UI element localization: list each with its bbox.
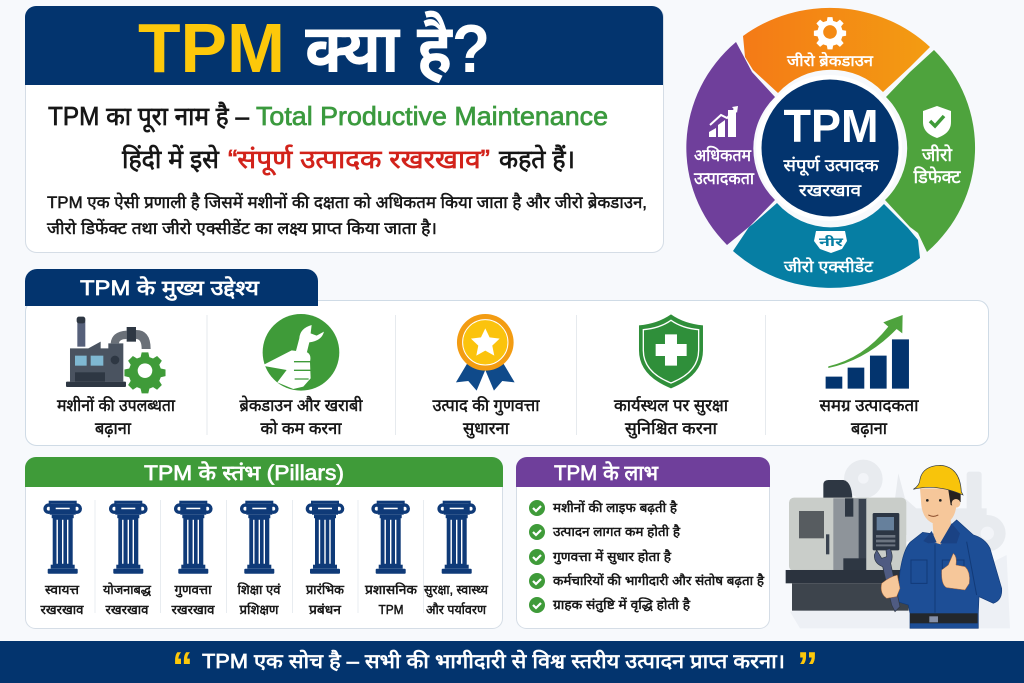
objective: overall productivity (820, 315, 919, 438)
benefit 4: कर्मचारियों की भागीदारी और संतोष बढ़ता है (553, 573, 765, 588)
icon: factory machine with gear (66, 317, 166, 393)
pillar 6: TPM (378, 602, 404, 617)
heading bar: TPM के लाभ (554, 461, 659, 485)
footer quote bar (0, 641, 1024, 683)
objective: overall productivity: समग्र उत्पादकता (820, 397, 919, 415)
description (47, 191, 647, 238)
pillar 6: प्रशासनिक (365, 582, 418, 597)
pillar 1: रखरखाव (40, 602, 84, 617)
pillar 1: स्वायत्त (45, 582, 80, 597)
objective: improve quality (432, 314, 540, 439)
segment: zero defect (885, 50, 975, 252)
pillar 4: शिक्षा एवं (238, 582, 281, 597)
hindi name line: कहते हैं। (499, 144, 575, 174)
center hub: संपूर्ण उत्पादक (784, 155, 880, 177)
wrench and hand (874, 548, 900, 612)
segment: zero accident: जीरो एक्सीडेंट (784, 257, 874, 276)
heading banner: TPM (138, 9, 285, 87)
heading tab: TPM के मुख्य उद्देश्य (80, 276, 260, 301)
benefit 2: उत्पादन लागत कम होती है (553, 524, 681, 539)
worker head and helmet (913, 465, 963, 525)
hindi name line: “संपूर्ण उत्पादक रखरखाव” (228, 144, 490, 175)
heading banner: क्या है? (305, 11, 490, 87)
panel: TPM kya hai (25, 6, 664, 252)
panel: benefits (516, 457, 770, 628)
icon: growth bars (826, 315, 909, 389)
full name line: TPM का पूरा नाम है – (48, 101, 249, 132)
center hub (756, 75, 902, 221)
pillar 1 (40, 501, 84, 617)
pillar 3: रखरखाव (172, 602, 215, 617)
icon: hand with wrench (262, 314, 339, 391)
pillar 2: योजनाबद्ध (103, 582, 152, 597)
center hub: रखरखाव (799, 181, 862, 200)
icon: safety shield (639, 314, 703, 388)
heading bar (25, 457, 503, 487)
icon: medal (456, 314, 515, 391)
objective: workplace safety (614, 314, 729, 439)
pillar 6 (365, 501, 418, 617)
center hub: TPM (784, 100, 878, 152)
description: TPM एक ऐसी प्रणाली है जिसमें मशीनों की दक्षता को अधिकतम किया जाता है और जीरो ब्रेकडाउन, (47, 191, 647, 212)
segment: zero accident: नीर (819, 234, 844, 249)
objective: reduce breakdown: ब्रेकडाउन और खराबी (240, 396, 363, 415)
TPM wheel diagram (686, 8, 975, 288)
objective: improve quality: सुधारना (463, 420, 510, 439)
objective: reduce breakdown (240, 314, 363, 438)
heading banner (25, 6, 663, 87)
benefit 1: मशीनों की लाइफ बढ़ती है (553, 500, 678, 515)
objective: improve quality: उत्पाद की गुणवत्ता (432, 396, 540, 416)
segment: zero accident (733, 203, 920, 288)
segment: zero breakdown: जीरो ब्रेकडाउन (787, 51, 873, 70)
heading bar: TPM के स्तंभ (Pillars) (144, 461, 344, 485)
pillar 5 (306, 501, 345, 617)
footer quote bar: TPM एक सोच है – सभी की भागीदारी से विश्व स्तरीय उत्पादन प्राप्त करना। (202, 648, 785, 673)
hindi name line (122, 144, 575, 175)
machine (786, 480, 909, 611)
objective: workplace safety: सुनिश्चित करना (625, 420, 718, 439)
panel: main objectives (25, 269, 988, 446)
full name line (48, 101, 608, 132)
thumbs up hand (942, 553, 970, 590)
pillar 4 (238, 501, 281, 617)
pillar 7: और पर्यावरण (426, 602, 487, 617)
pillar 7 (424, 501, 488, 617)
heading tab (25, 269, 318, 306)
objective: machine availability: बढ़ाना (95, 420, 132, 438)
objective: workplace safety: कार्यस्थल पर सुरक्षा (614, 396, 729, 416)
pillar 4: प्रशिक्षण (240, 602, 279, 617)
pillar 7: सुरक्षा, स्वास्थ्य (424, 582, 488, 598)
hindi name line: हिंदी में इसे (122, 144, 219, 174)
segment: zero defect: जीरो (922, 145, 952, 165)
full name line: Total Productive Maintenance (256, 101, 608, 131)
background factory silhouette (790, 460, 1010, 628)
pillar 2: रखरखाव (106, 602, 149, 617)
segment: maximum productivity: अधिकतम (694, 147, 752, 165)
segment: maximum productivity (686, 42, 775, 245)
objective: machine availability (57, 317, 176, 438)
pillar 3: गुणवत्ता (174, 582, 212, 598)
segment: maximum productivity: उत्पादकता (694, 170, 755, 188)
segment: zero breakdown (743, 8, 930, 93)
objective: overall productivity: बढ़ाना (851, 420, 888, 438)
objective: machine availability: मशीनों की उपलब्धता (57, 396, 176, 415)
pillar 3 (172, 501, 215, 617)
segment: zero defect: डिफेक्ट (914, 166, 961, 187)
illustration: worker at CNC machine (786, 460, 1010, 628)
heading bar (516, 457, 770, 487)
pillar 2 (103, 501, 152, 617)
pillar 5: प्रबंधन (309, 602, 342, 617)
objective: reduce breakdown: को कम करना (260, 420, 342, 438)
worker body (897, 520, 1002, 628)
benefit 3: गुणवत्ता में सुधार होता है (553, 549, 672, 565)
description: जीरो डिफेंक्ट तथा जीरो एक्सीडेंट का लक्ष्य प्राप्त किया जाता है। (47, 217, 437, 238)
pillar 5: प्रारंभिक (306, 582, 345, 597)
panel: pillars (25, 457, 503, 628)
benefit 5: ग्राहक संतुष्टि में वृद्धि होती है (553, 597, 691, 613)
